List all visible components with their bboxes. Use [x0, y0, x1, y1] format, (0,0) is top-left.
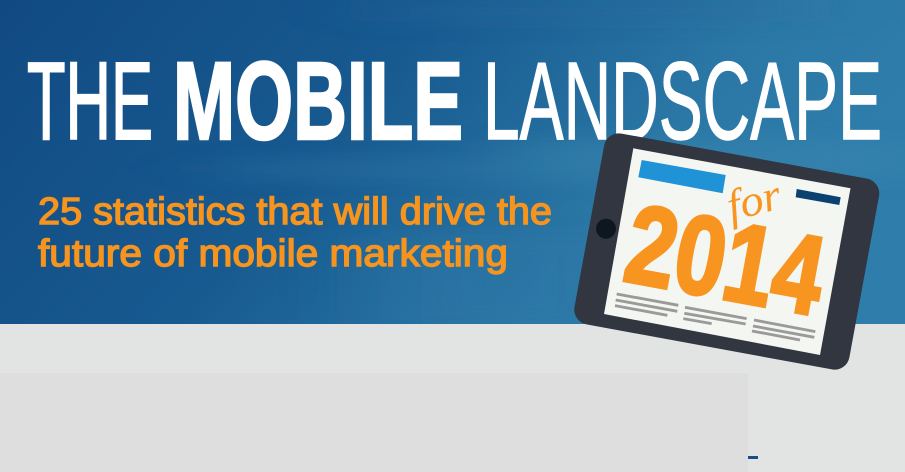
title: THE [27, 40, 153, 163]
small navy dash [748, 456, 758, 459]
lower gray panel [0, 373, 748, 472]
title [27, 40, 882, 163]
blue header bar [638, 160, 726, 193]
blue banner [0, 0, 905, 325]
script word for: for [722, 170, 787, 231]
title: MOBILE [173, 40, 463, 163]
article text lines [615, 294, 815, 340]
tablet screen [604, 148, 850, 355]
subtitle: future of mobile marketing [38, 233, 508, 275]
subtitle [38, 191, 552, 275]
tablet illustration [572, 131, 882, 372]
subtitle: 25 statistics that will drive the [38, 191, 552, 233]
navy header bar [796, 189, 841, 205]
camera button [596, 219, 616, 239]
year 2014: 2014 [617, 181, 834, 339]
tablet body [572, 131, 882, 372]
